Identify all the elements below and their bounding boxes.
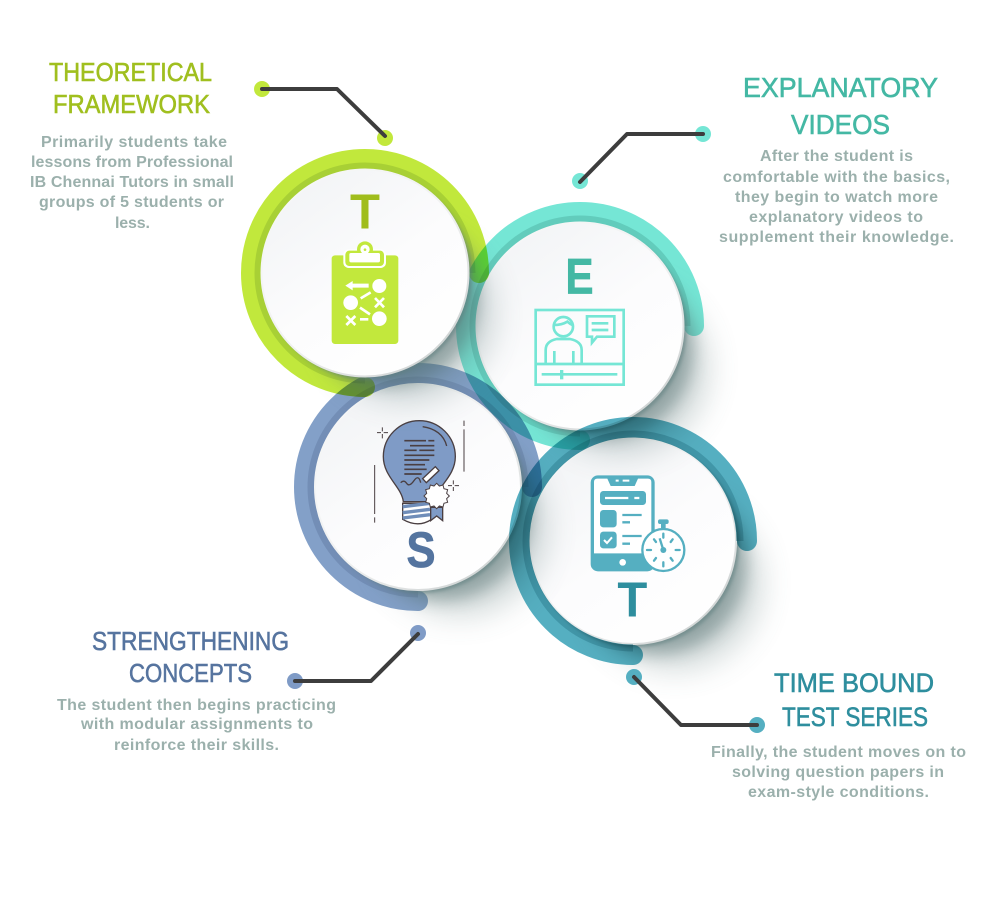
circle base: time bound test series <box>530 438 760 668</box>
heading: theoretical framework: FRAMEWORK <box>53 89 211 119</box>
letter T: theoretical: T <box>350 186 380 240</box>
letter T: test series: T <box>617 574 647 628</box>
text: time bound test series: exam-style conditions. <box>748 784 929 801</box>
heading: strengthening concepts: CONCEPTS <box>129 658 252 688</box>
text: theoretical framework: IB Chennai Tutors in small <box>30 174 234 191</box>
text: theoretical framework: Primarily students take <box>41 134 227 151</box>
ring: theoretical framework <box>251 159 479 387</box>
text: theoretical framework: lessons from Professional <box>31 154 233 171</box>
text: explanatory videos: After the student is <box>760 148 913 165</box>
text: explanatory videos: explanatory videos to <box>749 209 923 226</box>
ring: time bound test series <box>519 427 747 655</box>
text: explanatory videos: comfortable with the basics, <box>723 169 950 186</box>
heading: explanatory videos <box>743 72 938 140</box>
text: theoretical framework: less. <box>115 215 150 232</box>
heading: explanatory videos: VIDEOS <box>791 109 890 140</box>
text: explanatory videos: they begin to watch more <box>735 189 938 206</box>
ring: explanatory videos <box>466 212 694 440</box>
text: strengthening concepts: with modular assignments to <box>80 716 313 733</box>
text: time bound test series: solving question papers in <box>732 764 944 781</box>
icon: phone with stopwatch <box>591 475 684 571</box>
text: strengthening concepts: The student then begins practicing <box>57 697 336 714</box>
circle: strengthening concepts <box>315 384 545 614</box>
heading: strengthening concepts: STRENGTHENING <box>92 626 289 656</box>
heading: theoretical framework: THEORETICAL <box>49 57 212 87</box>
letter E: E <box>566 248 594 304</box>
text: explanatory videos: supplement their knowledge. <box>719 229 954 246</box>
text: time bound test series: Finally, the student moves on to <box>711 744 966 761</box>
text: theoretical framework <box>30 134 234 232</box>
leader: strengthening concepts <box>287 625 426 689</box>
icon: video lesson <box>536 310 624 385</box>
leader: theoretical framework <box>254 81 393 146</box>
heading: explanatory videos: EXPLANATORY <box>743 72 938 103</box>
heading: time bound test series <box>774 668 934 732</box>
leader: time bound test series <box>626 669 765 733</box>
heading: time bound test series: TEST SERIES <box>782 702 928 732</box>
leader: explanatory videos <box>572 126 711 189</box>
text: explanatory videos <box>719 148 954 246</box>
icon: clipboard strategy <box>332 241 398 344</box>
heading: strengthening concepts <box>92 626 289 688</box>
text: theoretical framework: groups of 5 students or <box>39 194 224 211</box>
circle: explanatory videos <box>476 222 707 453</box>
text: time bound test series <box>711 744 966 801</box>
heading: time bound test series: TIME BOUND <box>774 668 934 698</box>
text: strengthening concepts <box>57 697 336 754</box>
text: strengthening concepts: reinforce their skills. <box>114 737 279 754</box>
ring: strengthening concepts <box>304 373 532 601</box>
circle: theoretical framework <box>262 170 492 400</box>
heading: theoretical framework <box>49 57 212 119</box>
icon: light bulb with certificate <box>375 421 464 524</box>
letter S: S <box>406 522 436 578</box>
